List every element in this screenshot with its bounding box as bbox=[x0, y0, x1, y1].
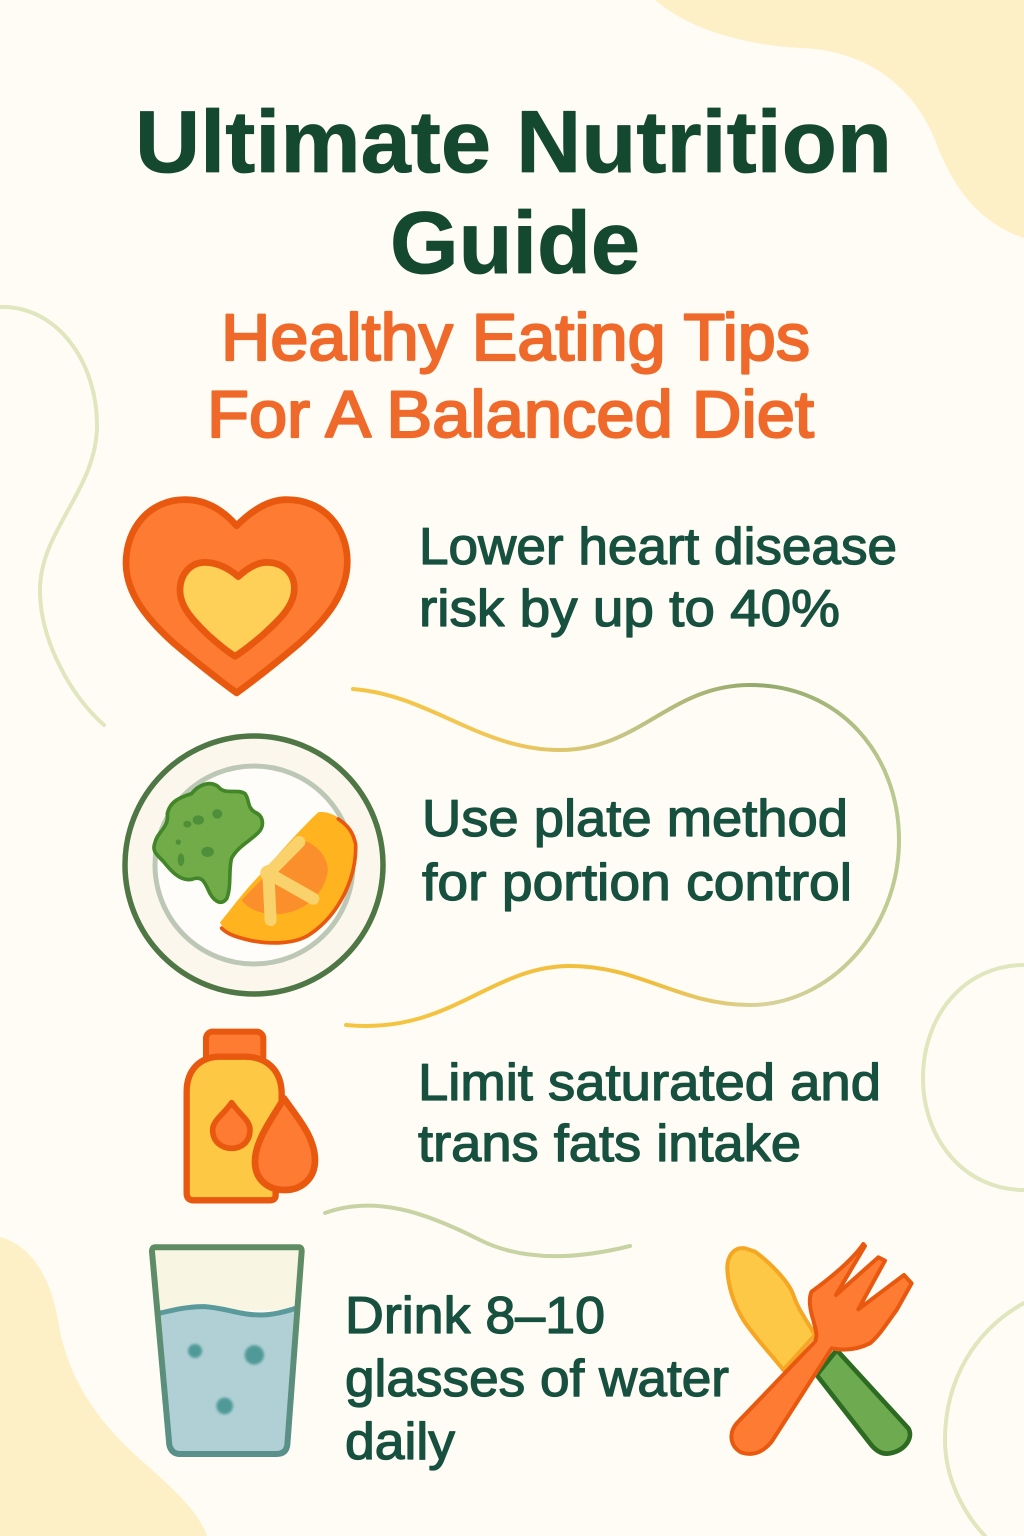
text: plate method: for portion control bbox=[422, 854, 852, 912]
text: plate method bbox=[422, 790, 852, 912]
text: saturated fats: Limit saturated and bbox=[418, 1054, 881, 1112]
icon: knife and fork bbox=[727, 1244, 912, 1454]
title: Ultimate Nutrition bbox=[135, 92, 892, 191]
orange slice bbox=[220, 812, 355, 943]
icon: heart bbox=[126, 500, 347, 693]
text: heart disease: Lower heart disease bbox=[419, 518, 897, 576]
title bbox=[135, 92, 892, 292]
text: heart disease bbox=[419, 518, 897, 638]
text: water: Drink 8–10 bbox=[345, 1287, 605, 1345]
title: Guide bbox=[390, 193, 640, 292]
subtitle bbox=[207, 300, 814, 451]
text: heart disease: risk by up to 40% bbox=[419, 580, 840, 638]
subtitle: For A Balanced Diet bbox=[207, 377, 814, 451]
broccoli bbox=[154, 784, 262, 902]
text: water: daily bbox=[345, 1413, 455, 1471]
icon: oil bottle bbox=[187, 1032, 315, 1200]
subtitle: Healthy Eating Tips bbox=[221, 300, 810, 374]
text: water: glasses of water bbox=[345, 1350, 729, 1408]
connector: short wave bbox=[325, 1206, 630, 1256]
text: plate method: Use plate method bbox=[422, 790, 848, 848]
text: water bbox=[345, 1287, 729, 1471]
text: saturated fats bbox=[418, 1054, 881, 1173]
icon: water glass bbox=[152, 1247, 302, 1454]
icon: plate bbox=[125, 736, 383, 994]
text: saturated fats: trans fats intake bbox=[418, 1115, 801, 1173]
connector: wave around plate text bbox=[346, 685, 899, 1026]
